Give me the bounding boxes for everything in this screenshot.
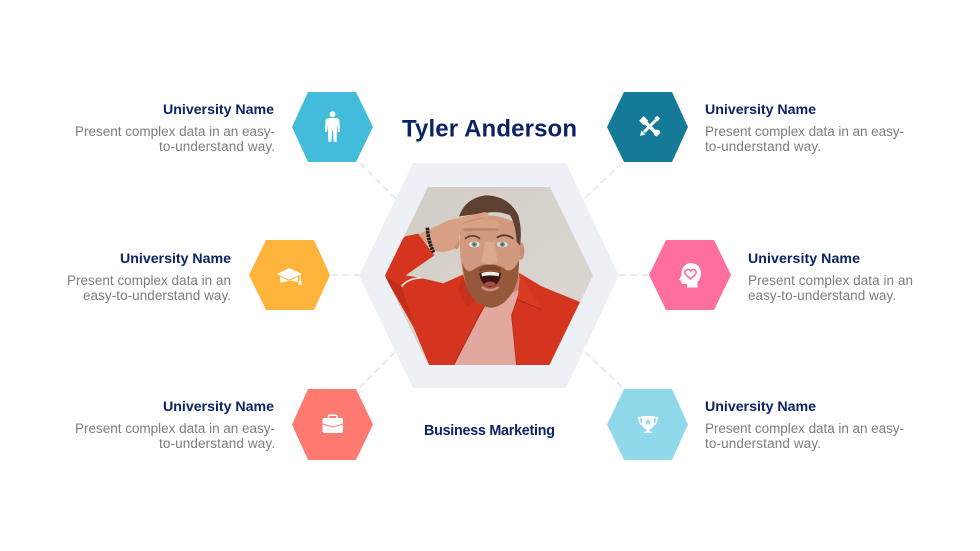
icon: briefcase (322, 415, 343, 433)
text block: middle right: easy-to-understand way. (748, 288, 896, 303)
mouth (479, 271, 501, 287)
subtitle: Business Marketing (424, 423, 555, 439)
jacket (385, 234, 580, 367)
eyes (469, 241, 480, 247)
icon: head with heart (679, 263, 701, 288)
connector lines (331, 163, 649, 387)
shirt (453, 289, 520, 367)
hexagon: dark teal tools (607, 92, 688, 162)
title: Tyler Anderson (402, 116, 577, 142)
placket shadows (453, 310, 482, 365)
hexagon: pink mind (649, 240, 731, 310)
text block: middle right (748, 251, 913, 303)
text block: top left (75, 102, 275, 154)
icon: person (325, 111, 340, 142)
text block: middle left: easy-to-understand way. (83, 288, 231, 303)
central hexagon frame (359, 163, 619, 388)
text block: middle right: University Name (748, 251, 860, 267)
text block: bottom right: Present complex data in an easy- (705, 421, 904, 436)
icon: trophy (639, 416, 657, 433)
text block: top right: Present complex data in an easy- (705, 124, 904, 139)
text block: top left: University Name (163, 102, 274, 118)
text block: top left: Present complex data in an easy- (75, 124, 275, 139)
text block: top right (705, 102, 904, 154)
text block: top right: to-understand way. (705, 139, 821, 154)
text block: middle left: University Name (120, 251, 231, 267)
text block: bottom left: to-understand way. (159, 436, 275, 451)
text block: bottom left (75, 399, 275, 451)
moustache (479, 265, 501, 272)
nose (482, 242, 498, 264)
icon: graduation cap (277, 268, 302, 285)
text block: top left: to-understand way. (159, 139, 275, 154)
text block: middle left: Present complex data in an (67, 273, 231, 288)
collars (458, 276, 476, 306)
text block: bottom right (705, 399, 904, 451)
text block: middle right: Present complex data in an (748, 273, 913, 288)
hexagon: teal-blue person (292, 92, 373, 162)
beard (462, 260, 519, 308)
eyebrows (465, 236, 480, 239)
hexagon: coral briefcase (292, 389, 373, 460)
face (460, 216, 520, 286)
neck (512, 272, 520, 293)
text block: top right: University Name (705, 102, 816, 118)
text block: bottom right: to-understand way. (705, 436, 821, 451)
ears (520, 242, 524, 260)
hexagon: light blue trophy (607, 389, 688, 460)
hexagon: amber graduation (249, 240, 330, 310)
bracelet (427, 228, 434, 252)
icon: crossed tools (639, 116, 660, 136)
text block: middle left (67, 251, 231, 303)
hand (418, 212, 499, 252)
text block: bottom right: University Name (705, 399, 816, 415)
sleeve shadow (385, 277, 413, 323)
portrait photo (385, 187, 593, 367)
hand shadow (462, 228, 500, 231)
text block: bottom left: Present complex data in an easy- (75, 421, 275, 436)
hair (459, 195, 521, 245)
text block: bottom left: University Name (163, 399, 274, 415)
